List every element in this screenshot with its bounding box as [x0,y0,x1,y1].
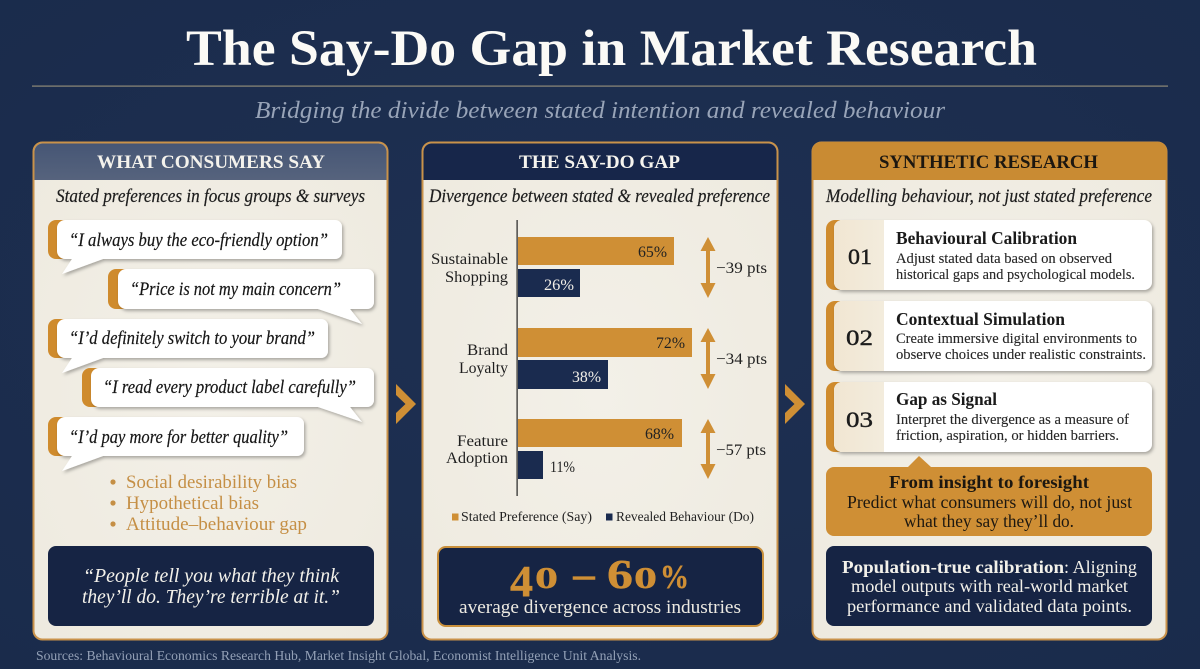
bias list: Social desirability bias [126,472,297,493]
quote callout: they’ll do. They’re terrible at it.” [82,586,340,608]
speech bubble 1 [48,220,342,274]
legend: Revealed Behaviour (Do) [616,510,754,525]
panel: the say-do gap [422,142,778,640]
card 01: historical gaps and psychological models. [896,267,1135,283]
panel heading: the say-do gap [424,144,776,180]
panel subheading: Divergence between stated & revealed preference [428,187,770,207]
speech bubble 4: “I read every product label carefully” [103,377,356,398]
legend [452,510,754,525]
card 02: Create immersive digital environments to [896,331,1137,347]
category: brand loyalty [459,328,692,389]
category: sustainable shopping: 65% [638,244,667,261]
stat value: 40 – 60%: 0 [535,560,558,595]
category: sustainable shopping: Sustainable [431,251,508,268]
category: sustainable shopping: 26% [544,277,574,294]
card 01 [826,220,1152,290]
panel heading: synthetic research [812,142,1167,180]
speech bubble 5 [48,417,304,471]
panel heading: synthetic research: SYNTHETIC RESEARCH [879,153,1099,173]
panel: synthetic research [812,142,1167,640]
category: brand loyalty: 38% [572,369,601,386]
card 02: 02 [846,325,873,350]
panel heading: what consumers say [34,144,386,180]
title: The Say-Do Gap in Market Research [186,21,1037,77]
population-true calibration callout: Population-true calibration [842,557,1064,577]
bias list: Attitude–behaviour gap [126,514,307,535]
category: sustainable shopping [431,237,674,297]
gap arrow: -39 pts: −39 pts [716,260,767,277]
card 03: friction, aspiration, or hidden barriers. [896,428,1119,444]
foresight callout [826,456,1152,536]
speech bubble 4 [82,368,374,422]
gap arrow: -34 pts [700,328,767,389]
population-true calibration callout: model outputs with real-world market [851,576,1128,596]
category: feature adoption: Adoption [446,450,508,467]
card 02: Contextual Simulation [896,309,1065,329]
stat callout [438,547,763,626]
category: feature adoption: Feature [457,433,508,450]
speech bubble 3 [48,319,328,373]
category: sustainable shopping: Shopping [445,269,508,286]
speech bubble 2: “Price is not my main concern” [130,279,341,300]
speech bubble 5: “I’d pay more for better quality” [69,427,288,448]
foresight callout: Predict what consumers will do, not just [847,492,1132,512]
bias list: Hypothetical bias [126,493,259,514]
card 02 [826,301,1152,371]
bias list [110,472,307,535]
quote callout [48,546,374,626]
card 03: 03 [846,407,873,432]
quote callout: “People tell you what they think [83,565,340,587]
population-true calibration callout [826,546,1152,626]
stat value: 40 – 60%: – [562,552,606,598]
card 03: Gap as Signal [896,389,997,409]
card 02: observe choices under realistic constraints. [896,347,1146,363]
panel: what consumers say [34,142,388,640]
foresight callout: what they say they’ll do. [904,511,1074,531]
arrow: say to gap [396,384,416,424]
arrow: gap to synthetic research [785,384,805,424]
population-true calibration callout: : Aligning [1064,557,1137,577]
panel subheading: Stated preferences in focus groups & surveys [56,187,365,207]
sources: Sources: Behavioural Economics Research Hub, Market Insight Global, Economist Intelligence Unit Analysis. [36,648,641,663]
stat value: 40 – 60%: 6 [607,551,633,597]
panel heading: what consumers say: WHAT CONSUMERS SAY [97,153,326,173]
card 03 [826,382,1152,452]
category: brand loyalty: Loyalty [459,360,508,377]
category: brand loyalty: Brand [467,342,508,359]
bar chart [431,220,767,496]
stat callout: average divergence across industries [459,597,741,618]
speech bubble 3: “I’d definitely switch to your brand” [69,328,315,349]
card 01: 01 [848,244,872,269]
panel heading: the say-do gap: THE SAY-DO GAP [519,153,680,173]
stat value: 40 – 60%: 4 [510,557,533,606]
card 01: Adjust stated data based on observed [896,251,1113,267]
card 03: Interpret the divergence as a measure of [896,412,1129,428]
gap arrow: -34 pts: −34 pts [716,351,767,368]
population-true calibration callout: performance and validated data points. [847,596,1132,616]
speech bubble 1: “I always buy the eco-friendly option” [69,230,328,251]
speech bubble 2 [108,269,374,324]
subtitle: Bridging the divide between stated intention and revealed behaviour [255,97,945,124]
category: feature adoption: 11% [550,459,575,476]
stat value: 40 – 60%: % [660,559,689,596]
legend: Stated Preference (Say) [461,510,592,525]
gap arrow: -57 pts: −57 pts [716,442,766,459]
category: feature adoption: 68% [645,426,674,443]
category: feature adoption [446,419,682,479]
gap arrow: -39 pts [700,237,767,298]
category: brand loyalty: 72% [656,335,685,352]
stat value: 40 – 60%: 0 [634,560,657,595]
foresight callout: From insight to foresight [889,472,1089,492]
card 01: Behavioural Calibration [896,228,1077,248]
stat value: 40 – 60% [510,551,689,606]
gap arrow: -57 pts [700,419,766,479]
panel subheading: Modelling behaviour, not just stated preference [825,187,1152,207]
